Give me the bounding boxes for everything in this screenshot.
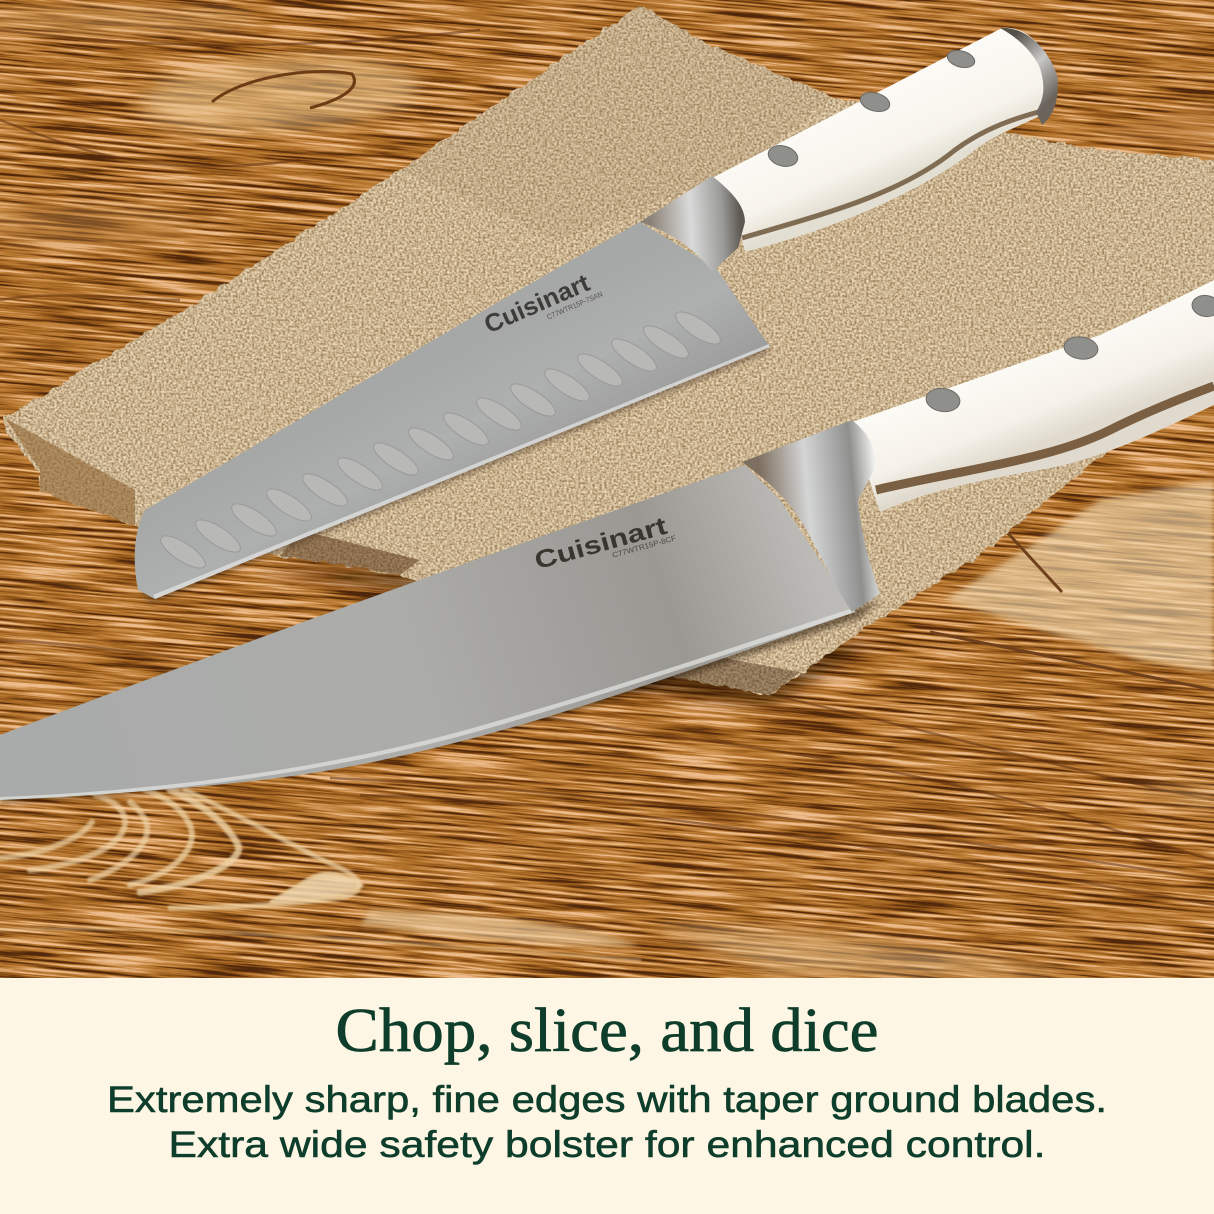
chef rivets	[925, 294, 1214, 414]
santoku bolster	[640, 176, 745, 272]
knife: santoku	[135, 28, 1058, 605]
wood: right pale patch	[930, 100, 1214, 690]
chef handle	[852, 280, 1214, 512]
wood: top-left knot	[0, 6, 422, 247]
title: Chop, slice, and dice	[336, 997, 878, 1065]
santoku end cap	[1000, 28, 1058, 125]
wood: lower-left growth rings	[0, 790, 640, 960]
knife: chef	[0, 280, 1214, 803]
santoku hollow-edge dimples	[156, 306, 725, 574]
burlap cloth	[0, 0, 1214, 720]
chef blade	[0, 465, 855, 800]
santoku brand mark: Cuisinart	[480, 269, 595, 339]
caption panel	[0, 978, 1214, 1214]
wood: lower pale streaks	[360, 780, 1214, 975]
body text: Extra wide safety bolster for enhanced control.	[168, 1124, 1046, 1165]
santoku handle	[712, 28, 1052, 252]
body text: Extremely sharp, fine edges with taper ground blades.	[107, 1079, 1107, 1120]
chef brand mark: Cuisinart	[531, 512, 671, 575]
shadow under the cloth and knives	[250, 570, 880, 705]
chef brand mark: C77WTR15P-8CF	[611, 533, 678, 560]
santoku shadow	[140, 340, 770, 605]
santoku blade	[135, 222, 770, 599]
santoku brand mark: C77WTR15P-7SAN	[545, 289, 604, 322]
chef brand mark	[536, 518, 676, 567]
body text	[107, 1079, 1107, 1165]
santoku rivets	[766, 48, 977, 170]
chef bolster	[742, 420, 880, 612]
chef knife shadow	[0, 600, 880, 803]
